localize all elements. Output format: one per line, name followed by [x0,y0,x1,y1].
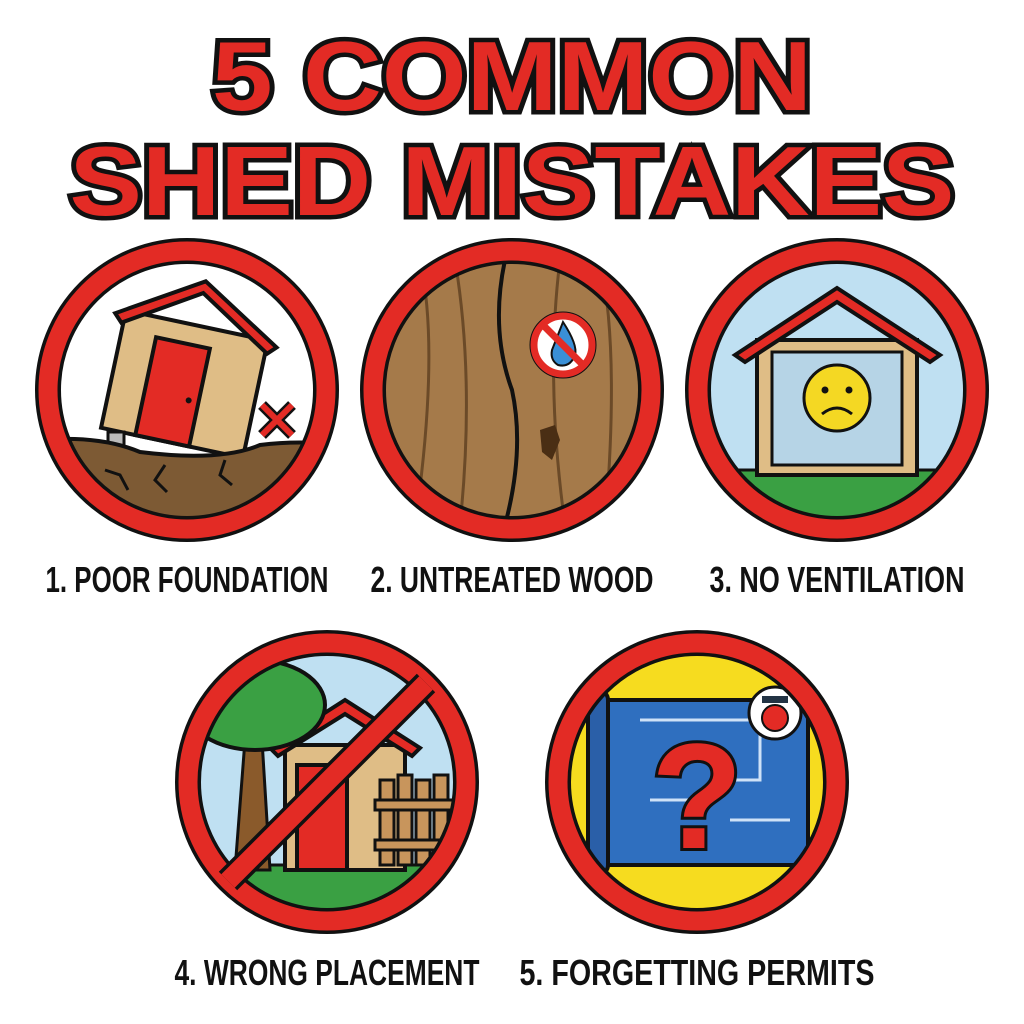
panel: wrong placement [185,643,470,935]
icon: question mark: ? [651,712,743,880]
icon: red x [262,405,292,435]
icon: no water [531,313,595,377]
panel: untreated wood [373,251,651,529]
icon: sad face [804,365,870,431]
label 5: 5. FORGETTING PERMITS [520,952,874,993]
icon: tilted shed [98,279,280,454]
panel: forgetting permits [558,643,840,925]
title: 5 COMMON [212,21,812,131]
label 1: 1. POOR FOUNDATION [46,559,328,600]
label 4: 4. WRONG PLACEMENT [174,952,480,993]
title: SHED MISTAKES [70,126,954,236]
icon: angry inspector [749,687,801,739]
title [70,21,954,236]
panel: no ventilation [698,251,976,540]
label 2: 2. UNTREATED WOOD [370,559,654,600]
panel: poor foundation [40,251,340,540]
